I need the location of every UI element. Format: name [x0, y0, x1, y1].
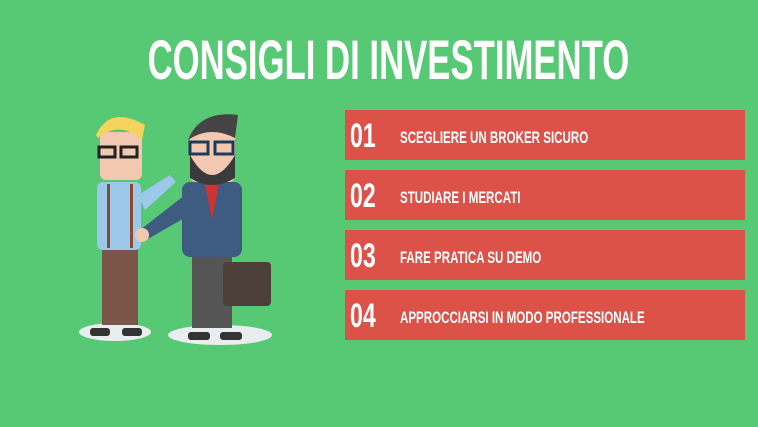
item 04: 04 — [350, 297, 376, 335]
item 04 — [345, 290, 745, 340]
item 01: SCEGLIERE UN BROKER SICURO — [400, 128, 588, 147]
item 01 — [345, 110, 745, 160]
item 03: FARE PRATICA SU DEMO — [400, 248, 541, 267]
item 02 — [345, 170, 745, 220]
item 03: 03 — [350, 237, 376, 275]
title: CONSIGLI DI INVESTIMENTO — [148, 28, 629, 91]
item 04: APPROCCIARSI IN MODO PROFESSIONALE — [400, 308, 645, 327]
item 03 — [345, 230, 745, 280]
item 02: STUDIARE I MERCATI — [400, 188, 521, 207]
illustration: two businessmen shaking hands — [79, 114, 272, 345]
item 02: 02 — [350, 177, 376, 215]
item 01: 01 — [350, 117, 376, 155]
